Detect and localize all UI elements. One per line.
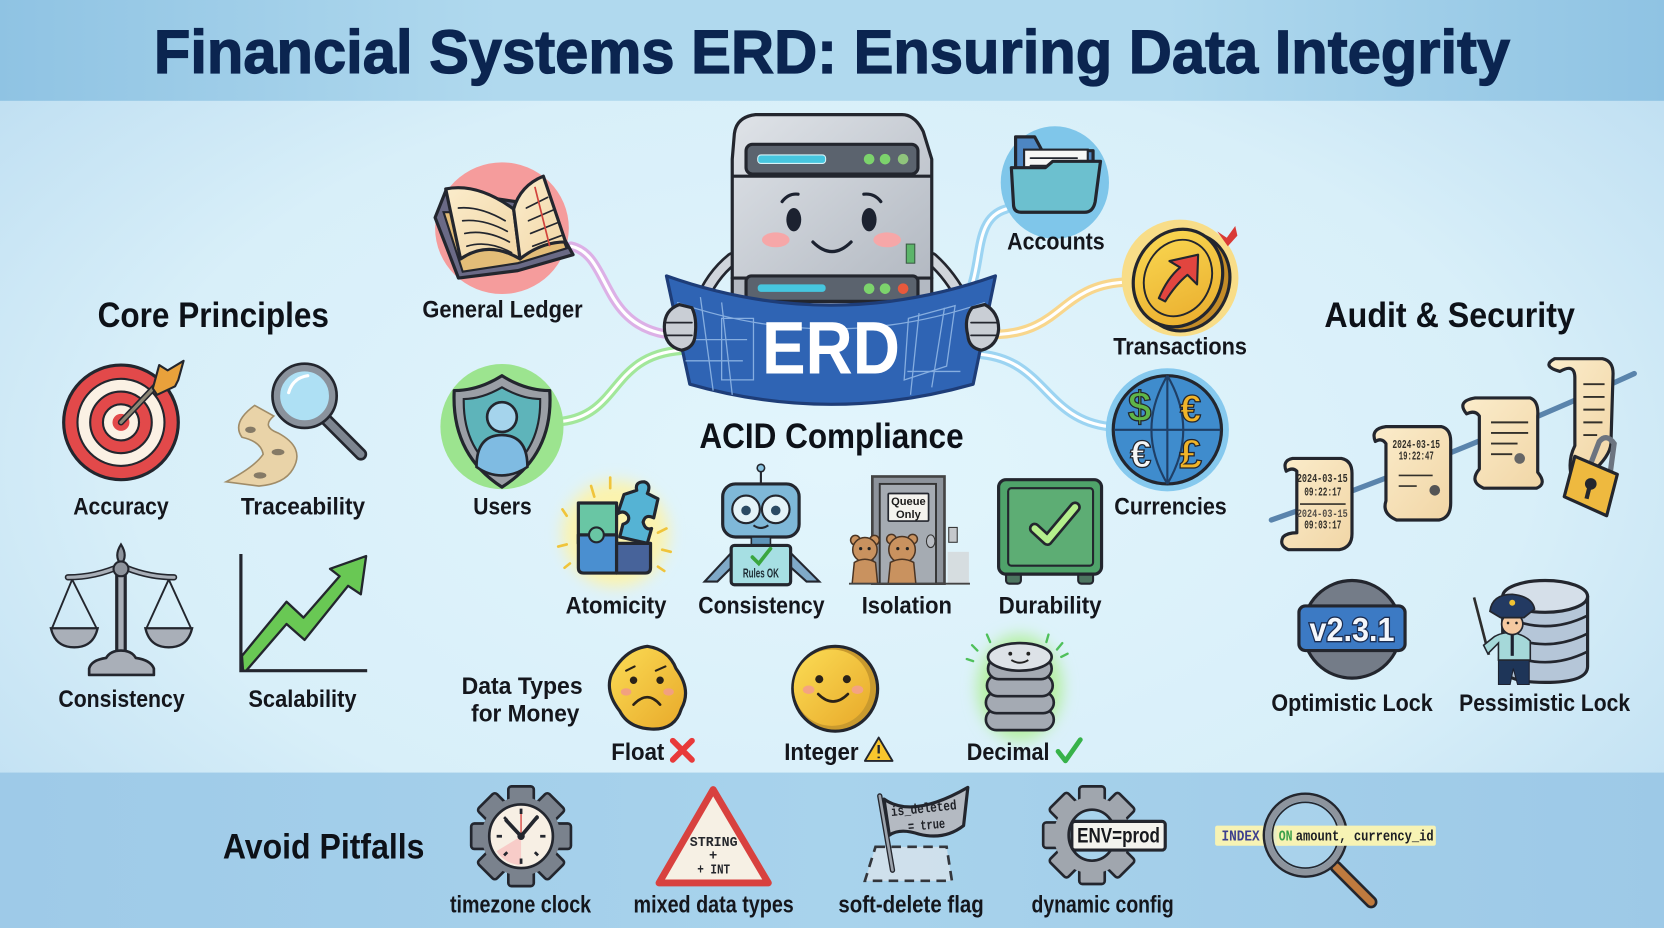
scroll 1: 09:22:17 bbox=[1304, 486, 1341, 500]
label: Transactions bbox=[1113, 333, 1247, 360]
heading: Data Types bbox=[462, 673, 583, 700]
item: index magnifier bbox=[1215, 794, 1436, 902]
icon: database with guard bbox=[1474, 580, 1588, 684]
scroll 1 bbox=[1282, 458, 1352, 550]
heading: Avoid Pitfalls bbox=[223, 828, 424, 867]
icon: globe with currency symbols: $ bbox=[1128, 383, 1152, 430]
label: timezone clock bbox=[450, 892, 591, 919]
icon: flag over dashed ghost record: is_deleted bbox=[890, 798, 957, 821]
label: mixed data types bbox=[634, 892, 794, 919]
icon: globe with currency symbols: € bbox=[1180, 387, 1201, 430]
label: Atomicity bbox=[566, 592, 667, 619]
heading: Audit & Security bbox=[1324, 296, 1575, 335]
scroll 1: 2024-03-15 bbox=[1297, 509, 1348, 521]
panel: Core Principles bbox=[51, 296, 367, 713]
item: Float bbox=[609, 646, 692, 766]
highlighted SQL text over lens: amount, currency_id bbox=[1296, 829, 1434, 845]
server body bbox=[732, 115, 932, 310]
label: Scalability bbox=[248, 686, 357, 713]
icon: globe with currency symbols: £ bbox=[1179, 431, 1202, 477]
label: Accuracy bbox=[73, 494, 169, 521]
label: Consistency bbox=[698, 592, 825, 619]
icon: green safe with check bbox=[999, 480, 1102, 584]
label with warning sign: Integer bbox=[784, 739, 859, 766]
icon: gear with ENV label: ENV=prod bbox=[1077, 825, 1160, 848]
scroll 4 bbox=[1549, 359, 1613, 472]
item: Atomicity bbox=[558, 478, 671, 619]
item: Integer bbox=[784, 646, 892, 766]
icon: robot Rules OK: Rules OK bbox=[743, 565, 779, 580]
icon: balance scale bbox=[51, 544, 192, 675]
item: Traceability bbox=[226, 364, 365, 521]
icon: version badge: v2.3.1 bbox=[1310, 611, 1394, 648]
panel: ACID Compliance bbox=[558, 417, 1102, 619]
scroll 1: 2024-03-15 bbox=[1297, 472, 1348, 486]
icon: warning triangle: + INT bbox=[697, 863, 730, 878]
node: Currencies bbox=[1106, 368, 1229, 521]
icon: flag over dashed ghost record: = true bbox=[908, 818, 946, 836]
label: Users bbox=[473, 494, 532, 521]
label: Isolation bbox=[862, 592, 952, 619]
panel: Audit & Security bbox=[1271, 296, 1634, 717]
item: dynamic config bbox=[1032, 786, 1174, 919]
node: Users bbox=[440, 364, 564, 521]
padlock bbox=[1564, 438, 1617, 516]
icon: globe with currency symbols: € bbox=[1130, 433, 1151, 476]
label: General Ledger bbox=[422, 296, 583, 323]
server arms bbox=[700, 259, 964, 304]
label: Optimistic Lock bbox=[1271, 690, 1433, 717]
panel: Avoid Pitfalls bbox=[223, 786, 1436, 919]
item: Durability bbox=[999, 480, 1102, 619]
icon: sad wobbly coin bbox=[609, 646, 686, 729]
item: Consistency bbox=[698, 464, 825, 619]
label: Consistency bbox=[58, 686, 185, 713]
icon: winding path and magnifier bbox=[226, 364, 361, 486]
scroll 3 bbox=[1463, 398, 1542, 488]
footer band bbox=[0, 773, 1664, 928]
icon: gold coin with arrow bbox=[1117, 214, 1246, 346]
scroll 2: 19:22:47 bbox=[1399, 450, 1434, 464]
item: Optimistic Lock bbox=[1271, 580, 1433, 717]
icon: stack of coins with green glow bbox=[967, 635, 1068, 741]
icon: door and two bears: Queue bbox=[891, 496, 926, 508]
node: General Ledger bbox=[422, 162, 583, 323]
heading: Core Principles bbox=[98, 296, 329, 335]
item: Accuracy bbox=[64, 361, 184, 521]
mascot hands bbox=[664, 305, 999, 350]
icon: audit log scrolls on a chain with padlock bbox=[1271, 359, 1634, 550]
central server mascot holding ERD blueprint bbox=[664, 115, 999, 404]
label: Accounts bbox=[1007, 228, 1105, 255]
icon: version badge bbox=[1299, 580, 1405, 678]
server face bbox=[762, 194, 901, 252]
item: Scalability bbox=[241, 554, 367, 713]
item: Consistency bbox=[51, 544, 192, 713]
icon: gear clock bbox=[471, 786, 571, 886]
icon: folder bbox=[1001, 126, 1109, 239]
connector lines bbox=[562, 209, 1123, 427]
icon: warning triangle bbox=[659, 790, 768, 883]
icon: puzzle pieces with glow bbox=[558, 478, 671, 587]
icon: warning triangle: STRING bbox=[690, 836, 738, 851]
scroll 2: 2024-03-15 bbox=[1392, 438, 1440, 452]
icon: gear with ENV label bbox=[1043, 786, 1165, 884]
icon: robot Rules OK bbox=[705, 464, 819, 585]
highlighted SQL text over lens: ON bbox=[1279, 829, 1293, 845]
scroll 2 bbox=[1374, 427, 1451, 520]
icon: growth chart arrow bbox=[241, 554, 367, 671]
heading line 2: for Money bbox=[471, 701, 580, 728]
icon: door and two bears: Only bbox=[896, 509, 922, 521]
icon: smiling coin bbox=[793, 646, 878, 731]
icon: magnifier bbox=[1264, 794, 1371, 902]
title: Financial Systems ERD: Ensuring Data Integrity bbox=[154, 18, 1510, 87]
panel: Data Types for Money bbox=[462, 635, 1080, 766]
label: dynamic config bbox=[1032, 892, 1174, 919]
heading: ACID Compliance bbox=[699, 417, 964, 456]
label: soft-delete flag bbox=[838, 892, 984, 919]
icon: shield with user bbox=[440, 364, 564, 489]
label with red X: Float bbox=[611, 739, 664, 766]
icon: target with arrow bbox=[64, 361, 184, 480]
highlighted SQL keyword INDEX bbox=[1215, 826, 1289, 846]
item: Isolation bbox=[849, 476, 970, 619]
scroll 1: 09:03:17 bbox=[1304, 518, 1341, 532]
node: Transactions bbox=[1113, 214, 1247, 360]
label: Durability bbox=[999, 592, 1102, 619]
label: Traceability bbox=[241, 494, 365, 521]
highlighted SQL keyword INDEX: INDEX bbox=[1221, 829, 1260, 845]
item: timezone clock bbox=[450, 786, 591, 919]
highlighted SQL text over lens bbox=[1277, 826, 1436, 846]
icon: globe with currency symbols bbox=[1106, 368, 1229, 491]
ERD blueprint banner: ERD bbox=[762, 307, 900, 390]
icon: door and two bears bbox=[849, 476, 970, 584]
chain bbox=[1271, 374, 1634, 520]
label: Pessimistic Lock bbox=[1459, 690, 1630, 717]
label: Currencies bbox=[1114, 494, 1227, 521]
label with green check: Decimal bbox=[967, 739, 1050, 766]
icon: flag over dashed ghost record bbox=[865, 787, 968, 881]
item: soft-delete flag bbox=[838, 787, 984, 919]
ERD blueprint banner bbox=[666, 276, 995, 404]
node: Accounts bbox=[1001, 126, 1109, 255]
item: Decimal bbox=[967, 635, 1080, 766]
icon: warning triangle: + bbox=[709, 850, 717, 865]
item: mixed data types bbox=[634, 790, 794, 919]
header band bbox=[0, 0, 1664, 101]
icon: open ledger book bbox=[435, 162, 573, 294]
item: Pessimistic Lock bbox=[1459, 580, 1630, 717]
